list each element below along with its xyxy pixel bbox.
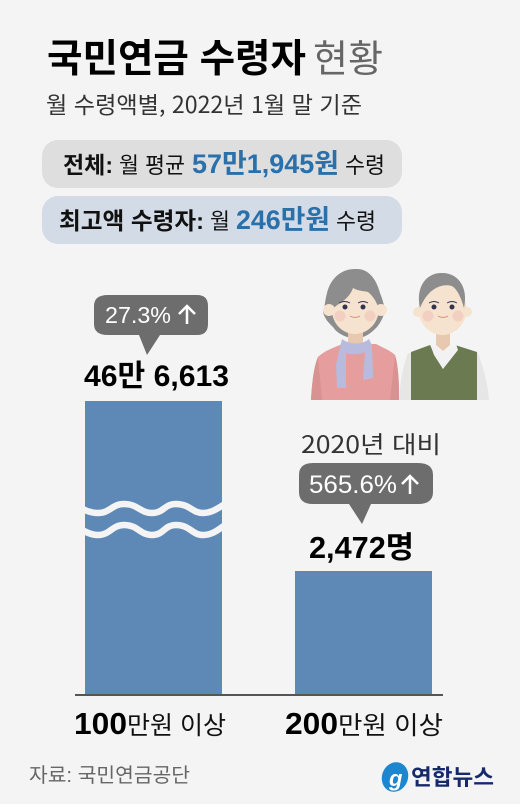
axis break <box>75 504 225 535</box>
callout: top recipient: 수령 <box>336 209 376 234</box>
label: 2020년 대비: 2020년 대비 <box>301 425 441 460</box>
callout: overall average: 월 평균 <box>119 153 185 178</box>
bubble: 27.3% up <box>94 295 208 355</box>
callout: overall average <box>42 140 402 188</box>
callout: top recipient: 최고액 수령자: <box>59 208 204 234</box>
title: 국민연금 수령자 <box>47 38 306 81</box>
callout: top recipient <box>42 196 402 244</box>
bar: 200만원 이상 <box>295 571 432 695</box>
callout: top recipient: 246만원 <box>236 205 330 235</box>
label: 100만원 이상: 만원 이상 <box>127 712 226 740</box>
label: 200만원 이상 <box>285 706 443 741</box>
subtitle: 월 수령액별, 2022년 1월 말 기준 <box>46 86 362 120</box>
title: 현황 <box>313 28 383 83</box>
title <box>47 28 383 83</box>
callout: overall average: 57만1,945원 <box>192 149 339 179</box>
label: 200만원 이상: 만원 이상 <box>338 712 443 740</box>
label: 100만원 이상: 100 <box>74 706 127 741</box>
label: 100만원 이상 <box>74 706 226 741</box>
bar: 100만원 이상 <box>75 401 225 695</box>
bubble: 565.6% up <box>299 463 433 524</box>
callout: top recipient: 월 <box>210 209 230 234</box>
logo: Yonhap News: 연합뉴스 <box>411 765 494 790</box>
icon: grandmother <box>311 269 399 400</box>
logo: Yonhap News <box>378 758 494 796</box>
baseline <box>75 694 443 696</box>
callout: overall average: 전체: <box>63 152 113 178</box>
value: 46만 6,613: 46만 6,613 <box>84 360 229 393</box>
illustration: elderly couple <box>311 269 489 400</box>
label: 200만원 이상: 200 <box>285 706 338 741</box>
icon: logo globe: g <box>388 766 403 791</box>
bubble: 565.6% up: 565.6% <box>309 471 397 499</box>
icon: grandfather <box>399 273 489 400</box>
callout: overall average: 수령 <box>345 153 385 178</box>
value: 2,472명: 2,472명 <box>309 531 414 565</box>
source: 자료: 국민연금공단 <box>29 764 190 787</box>
bubble: 27.3% up: 27.3% <box>105 302 171 328</box>
